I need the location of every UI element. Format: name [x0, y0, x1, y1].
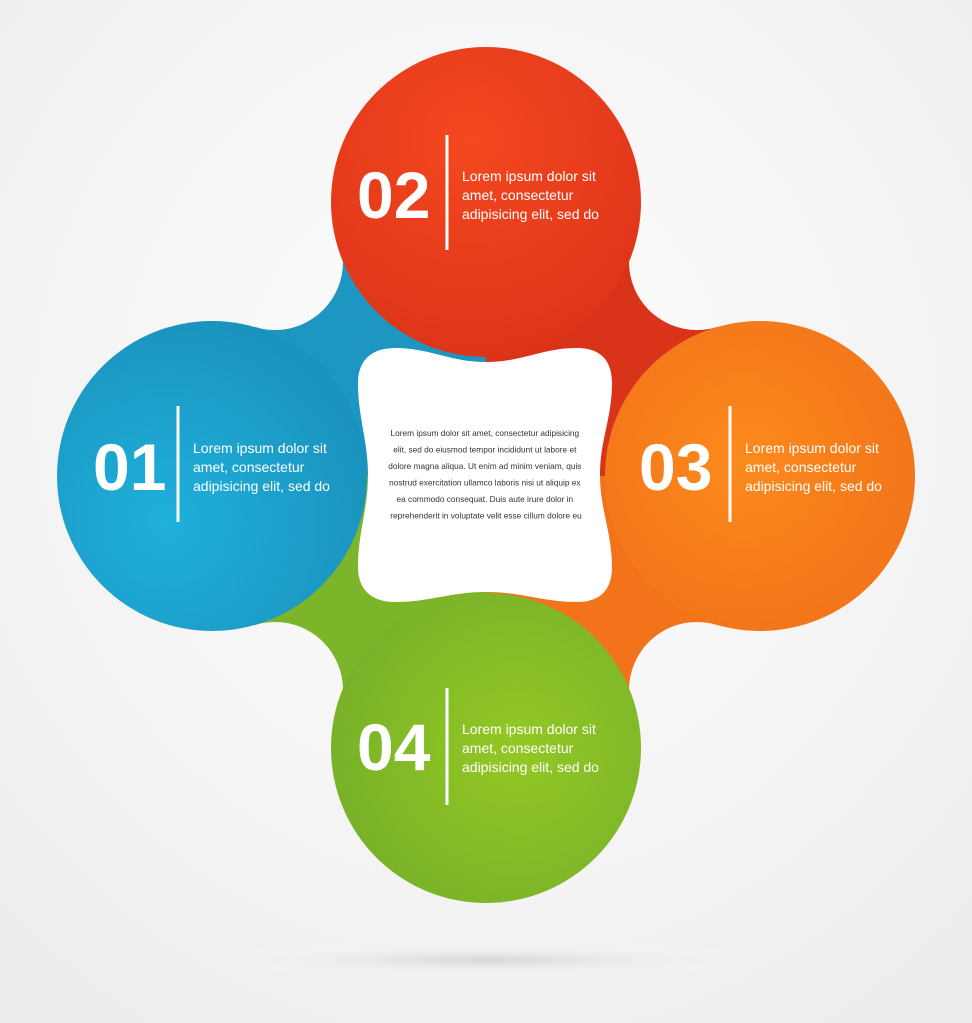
center text panel — [358, 348, 612, 602]
circle 03 orange: amet, consectetur — [745, 459, 857, 475]
circle 02 red — [331, 47, 641, 357]
circle 03 orange: Lorem ipsum dolor sit — [745, 440, 879, 456]
circle 03 orange: adipisicing elit, sed do — [745, 478, 882, 494]
center text panel: nostrud exercitation ullamco laboris nisi ut aliquip ex — [389, 478, 581, 488]
circle 04 green — [331, 593, 641, 903]
circle 01 blue: amet, consectetur — [193, 459, 305, 475]
circle 03 orange: 03 — [639, 430, 712, 504]
circle 02 red: 02 — [357, 158, 430, 232]
center text panel: elit, sed do eiusmod tempor incididunt ut labore et — [393, 444, 577, 454]
circle 04 green: amet, consectetur — [462, 740, 574, 756]
circle 01 blue: 01 — [93, 430, 166, 504]
floor shadow — [186, 942, 786, 978]
connecting quadrants — [256, 262, 716, 689]
circle 04 green: 04 — [357, 710, 431, 784]
circle 01 blue: adipisicing elit, sed do — [193, 478, 330, 494]
circle 01 blue: Lorem ipsum dolor sit — [193, 440, 327, 456]
center text panel: ea commodo consequat. Duis aute irure dolor in — [397, 494, 574, 504]
circle 03 orange — [605, 321, 915, 631]
circle 02 red: Lorem ipsum dolor sit — [462, 168, 596, 184]
circle 04 green: adipisicing elit, sed do — [462, 759, 599, 775]
circle 04 green: Lorem ipsum dolor sit — [462, 721, 596, 737]
center text panel: Lorem ipsum dolor sit amet, consectetur adipisicing — [391, 428, 580, 438]
circle 02 red: adipisicing elit, sed do — [462, 206, 599, 222]
center text panel: reprehenderit in voluptate velit esse cillum dolore eu — [390, 510, 582, 520]
center text panel: dolore magna aliqua. Ut enim ad minim veniam, quis — [388, 461, 581, 471]
circle 01 blue — [57, 321, 367, 631]
circle 02 red: amet, consectetur — [462, 187, 574, 203]
